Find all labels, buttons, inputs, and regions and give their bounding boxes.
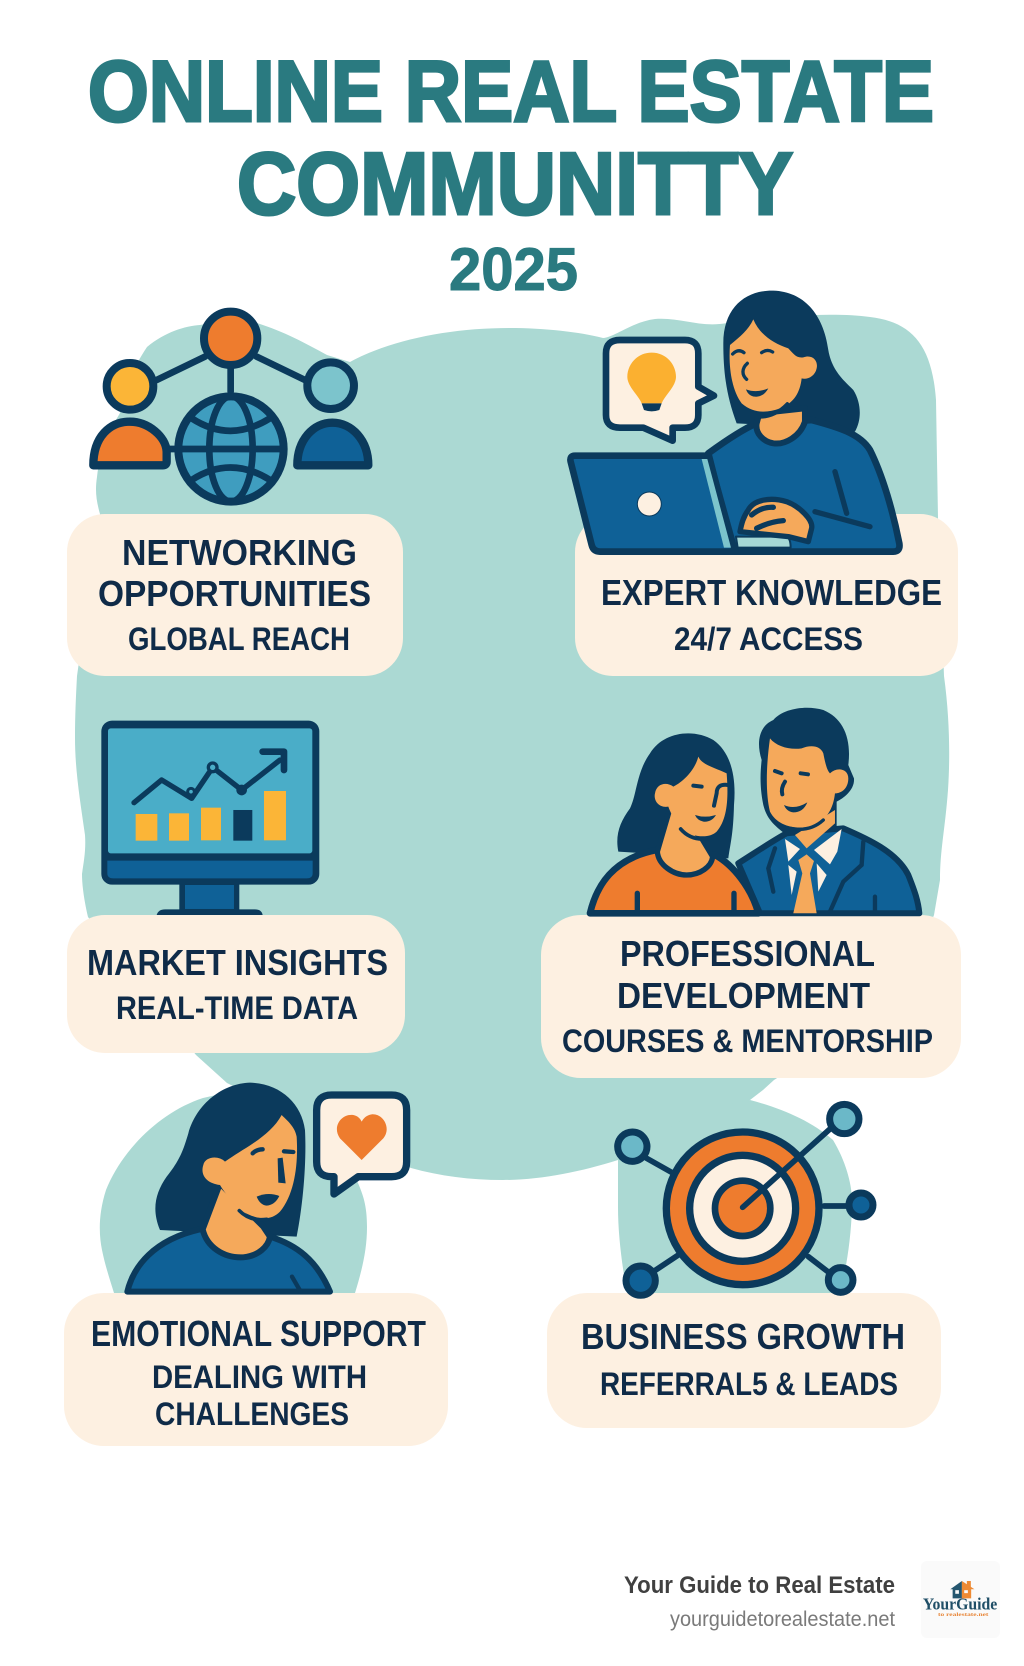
card: expert knowledge bbox=[575, 514, 958, 676]
subheading: courses and mentorship: COURSES & MENTORSHIP bbox=[562, 1023, 933, 1059]
subheading: global reach: GLOBAL REACH bbox=[128, 621, 350, 657]
icon: woman at laptop with lightbulb bubble bbox=[570, 291, 900, 552]
subheading: dealing with challenges bbox=[152, 1359, 367, 1432]
panel: networking opportunities bbox=[67, 312, 403, 676]
heading: networking bbox=[98, 532, 371, 614]
card: professional development bbox=[541, 915, 961, 1078]
card: business growth bbox=[547, 1293, 941, 1428]
heading: business growth: BUSINESS GROWTH bbox=[581, 1316, 905, 1357]
subheading: 24/7 access: 24/7 ACCESS bbox=[674, 621, 863, 657]
icon: man and woman bbox=[590, 708, 919, 913]
icon: monitor with chart bbox=[101, 721, 319, 915]
heading: emotional support: EMOTIONAL SUPPORT bbox=[91, 1313, 426, 1354]
panel: market insights bbox=[67, 721, 405, 1053]
panel: expert knowledge bbox=[570, 291, 958, 676]
footer brand name: Your Guide to Real Estate bbox=[624, 1572, 895, 1599]
logo: to realestate.net bbox=[938, 1612, 989, 1618]
logo: YourGuide bbox=[923, 1595, 997, 1614]
heading: professional development: DEVELOPMENT bbox=[617, 975, 870, 1016]
card: market insights bbox=[67, 915, 405, 1053]
panel: emotional support bbox=[64, 1083, 448, 1446]
heading: expert knowledge: EXPERT KNOWLEDGE bbox=[601, 572, 942, 613]
card: networking bbox=[67, 514, 403, 676]
icon: people network and globe bbox=[93, 312, 368, 502]
panel: business growth bbox=[547, 1104, 941, 1428]
title bbox=[88, 44, 934, 303]
subheading: real-time data: REAL-TIME DATA bbox=[116, 990, 358, 1026]
heading: networking: OPPORTUNITIES bbox=[98, 573, 371, 614]
heading: professional development: PROFESSIONAL bbox=[620, 933, 875, 974]
title: 2025 bbox=[449, 236, 578, 303]
card: emotional support bbox=[64, 1293, 448, 1446]
footer url: yourguidetorealestate.net bbox=[670, 1608, 895, 1631]
title: COMMUNITTY bbox=[237, 134, 793, 233]
heading: market insights: MARKET INSIGHTS bbox=[87, 942, 388, 983]
subheading: dealing with challenges: DEALING WITH bbox=[152, 1359, 367, 1395]
title: ONLINE REAL ESTATE bbox=[88, 44, 934, 140]
heading: professional development bbox=[617, 933, 875, 1016]
subheading: referrals and leads: REFERRAL5 & LEADS bbox=[600, 1366, 898, 1402]
subheading: dealing with challenges: CHALLENGES bbox=[155, 1396, 349, 1432]
heading: networking: NETWORKING bbox=[122, 532, 357, 573]
logo bbox=[921, 1561, 1000, 1638]
panel: professional development bbox=[541, 708, 961, 1078]
background blobs bbox=[75, 315, 949, 1293]
icon: target with connected nodes bbox=[618, 1104, 873, 1295]
icon: woman with heart bubble bbox=[127, 1083, 407, 1292]
